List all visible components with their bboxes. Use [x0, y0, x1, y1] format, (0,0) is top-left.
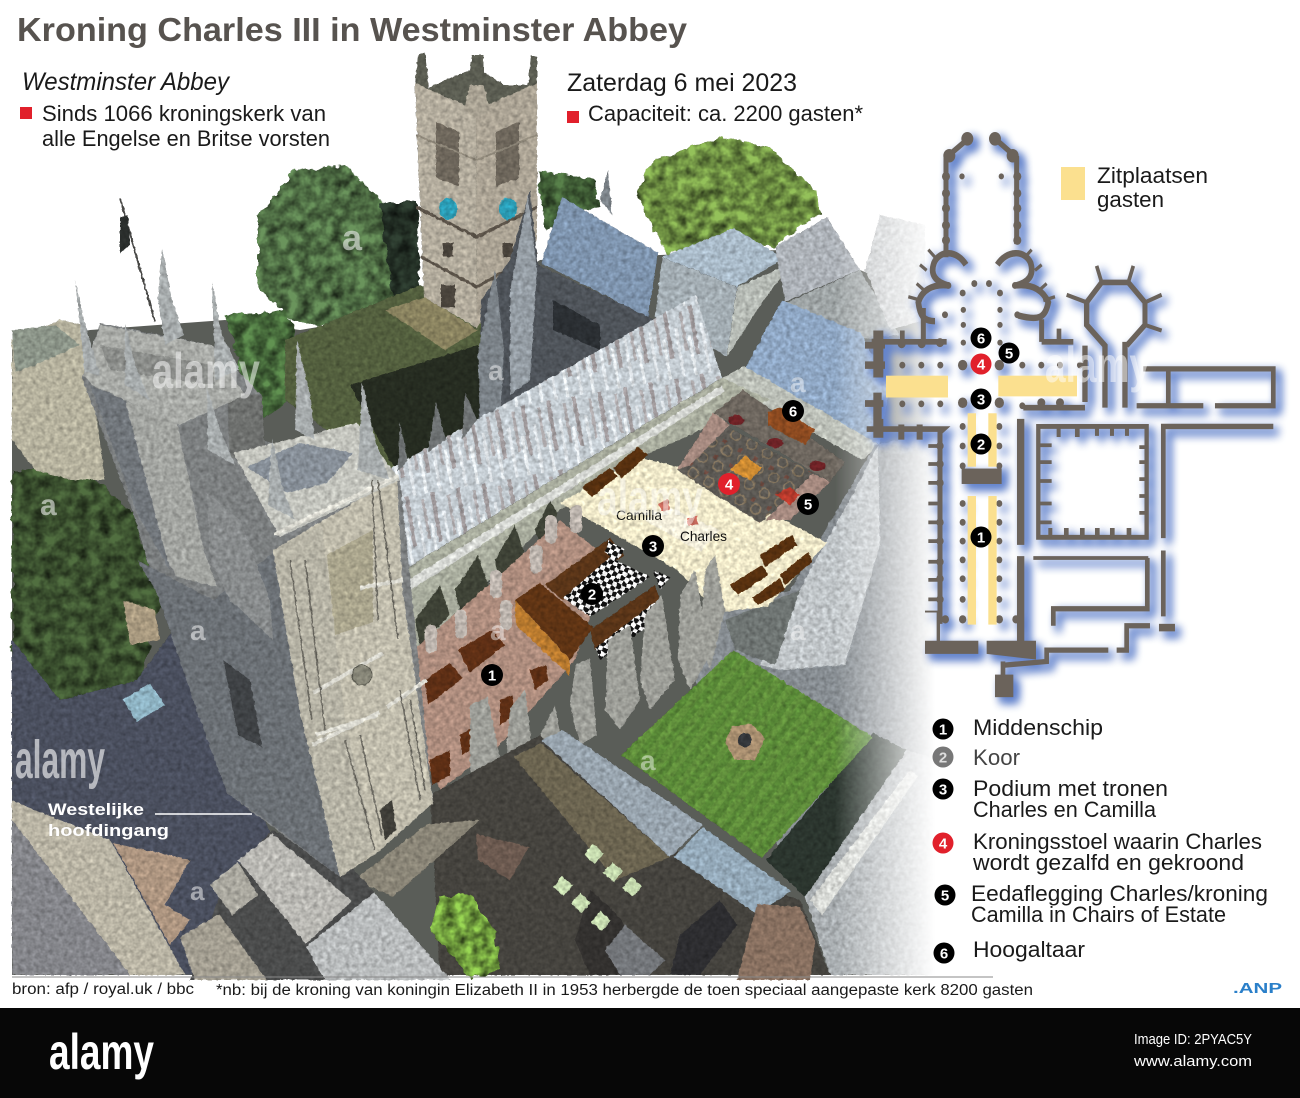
cloister walk and lower courtyards: [430, 730, 830, 980]
key item 6: Hoogaltaar: [973, 937, 1085, 962]
alamy watermarks: a: [342, 217, 363, 258]
intro block: date and capacity: Zaterdag 6 mei 2023: [567, 69, 797, 97]
plan: nave left buttresses: [928, 444, 940, 601]
stone columns in the nave: [425, 505, 582, 653]
west towers: [82, 323, 433, 877]
alamy watermarks: a: [790, 615, 806, 646]
alamy watermarks: a: [790, 367, 806, 398]
thrones: [645, 499, 720, 552]
seating legend: gasten: [1097, 187, 1164, 212]
aerial view of Westminster Abbey: [12, 52, 965, 985]
scene markers: 1: [488, 668, 496, 684]
church tower: [415, 52, 537, 328]
scene markers: 5: [804, 496, 812, 514]
nave pews: [425, 630, 548, 785]
key item 1: Middenschip: [973, 715, 1103, 740]
key item 6: [934, 937, 1085, 964]
key item 5: Eedaflegging Charles/kroning: [971, 881, 1268, 906]
flying buttresses: [470, 555, 725, 800]
key item 3: [932, 776, 1168, 822]
ANP logo: .ANP: [1233, 980, 1282, 997]
intro block: date and capacity: [567, 69, 863, 126]
alamy footer bar: Image ID: 2PYAC5Y: [1134, 1031, 1252, 1048]
key item 5: Camilla in Chairs of Estate: [971, 902, 1226, 927]
key item 6: 6: [940, 946, 948, 962]
plan: west front: [925, 611, 978, 654]
cloister lawn: [621, 650, 873, 858]
pink stone floor of the nave: [413, 520, 610, 790]
alamy watermarks: alamy: [1045, 337, 1150, 393]
plan markers: 6: [977, 330, 985, 348]
intro block: Westminster Abbey: [20, 68, 330, 151]
key item 3: Podium met tronen: [973, 776, 1168, 801]
plan markers: 5: [1005, 346, 1013, 362]
alamy footer bar: www.alamy.com: [1133, 1053, 1252, 1070]
key item 2: [932, 745, 1020, 770]
key item 3: Charles en Camilla: [973, 797, 1157, 822]
coronation chair: [730, 456, 762, 480]
skylights on lower roof: [553, 844, 642, 931]
alamy watermarks: alamy: [597, 470, 703, 526]
key item 5: 5: [941, 888, 949, 904]
flag on the tower: [120, 198, 155, 322]
alamy watermarks: a: [488, 355, 504, 386]
north side of the abbey: roofs, lantern and aisles: [478, 170, 925, 460]
alamy watermarks: a: [640, 745, 656, 776]
scene markers: 6: [789, 404, 797, 420]
trees: [12, 137, 820, 700]
intro block: Westminster Abbey: Sinds 1066 kroningskerk van: [42, 101, 326, 126]
checkered choir floor: [563, 540, 670, 660]
south transept and surroundings: [690, 430, 940, 975]
chairs of estate: [775, 487, 800, 505]
alamy watermarks: alamy: [152, 343, 260, 399]
right edge fade to white: [835, 100, 950, 985]
fade behind the floor plan: [935, 100, 965, 985]
plan markers: 2: [977, 436, 985, 454]
high altar platform and mosaic: [677, 390, 845, 523]
scene markers: [481, 400, 819, 686]
scene label: Charles: Charles: [680, 528, 727, 544]
left street buildings and ground: [12, 320, 290, 975]
alamy footer bar: alamy: [49, 1024, 154, 1080]
plan: columns: [898, 132, 1083, 623]
plan: choir screen: [962, 469, 1002, 484]
alamy watermarks: a: [490, 615, 506, 646]
intro block: Westminster Abbey: alle Engelse en Britse vorsten: [42, 126, 330, 151]
seating legend: Zitplaatsen: [1097, 163, 1208, 188]
source line: bron: afp / royal.uk / bbc: [12, 981, 194, 998]
key item 3: 3: [939, 782, 947, 798]
plan: guest seating areas: [886, 376, 1077, 625]
scene base silhouette: [12, 250, 940, 975]
alamy watermarks: alamy: [15, 730, 105, 790]
footnote: *nb: bij de kroning van koningin Elizabeth II in 1953 herbergde de toen speciaal aangepaste kerk 8200 gasten: [216, 982, 1033, 999]
main nave roof: [388, 295, 722, 572]
label: west main entrance: [48, 800, 252, 840]
alamy watermarks: [15, 217, 1150, 906]
key item 4: 4: [939, 836, 948, 852]
key item 1: 1: [939, 722, 947, 738]
floor plan of the abbey: [865, 132, 1273, 697]
scene markers: 2: [588, 586, 596, 604]
intro block: date and capacity: Capaciteit: ca. 2200 gasten*: [588, 101, 863, 126]
label: west main entrance: Westelijke: [48, 800, 144, 819]
plan markers: 3: [977, 392, 985, 408]
scene markers: 4: [725, 476, 734, 494]
choir stalls: [515, 538, 660, 676]
key item 2: Koor: [973, 745, 1020, 770]
seating legend: [1061, 163, 1208, 212]
key item 2: 2: [939, 750, 947, 766]
nave wall with gothic windows: [400, 378, 770, 655]
plan markers: 4: [977, 356, 986, 374]
alamy watermarks: a: [40, 489, 57, 522]
label: west main entrance: hoofdingang: [48, 821, 169, 840]
alamy footer bar: [0, 1008, 1300, 1098]
numbered key: [932, 715, 1268, 964]
key item 4: wordt gezalfd en gekroond: [972, 850, 1244, 875]
intro block: Westminster Abbey: Westminster Abbey: [22, 68, 230, 96]
scene markers: 3: [649, 538, 657, 556]
alamy watermarks: a: [190, 615, 206, 646]
tower spires: [75, 248, 390, 520]
plan markers: [970, 328, 1020, 548]
tree in the courtyard: [430, 895, 500, 978]
key item 5: [934, 881, 1268, 927]
buildings in front of west entrance: [180, 820, 480, 980]
plan markers: 1: [977, 530, 985, 546]
grounds behind the abbey: [285, 285, 530, 475]
key item 4: Kroningsstoel waarin Charles: [973, 829, 1262, 854]
title: Kroning Charles III in Westminster Abbey: [17, 11, 688, 48]
cream podium floor: [560, 457, 827, 612]
key item 4: [932, 829, 1262, 875]
pews around the podium: [582, 447, 812, 605]
plan: cloister buttress ticks: [1040, 426, 1147, 537]
scene label: Camilla: Camilla: [616, 507, 662, 523]
plan: transept ends: [865, 329, 1061, 440]
alamy watermarks: a: [190, 876, 205, 906]
